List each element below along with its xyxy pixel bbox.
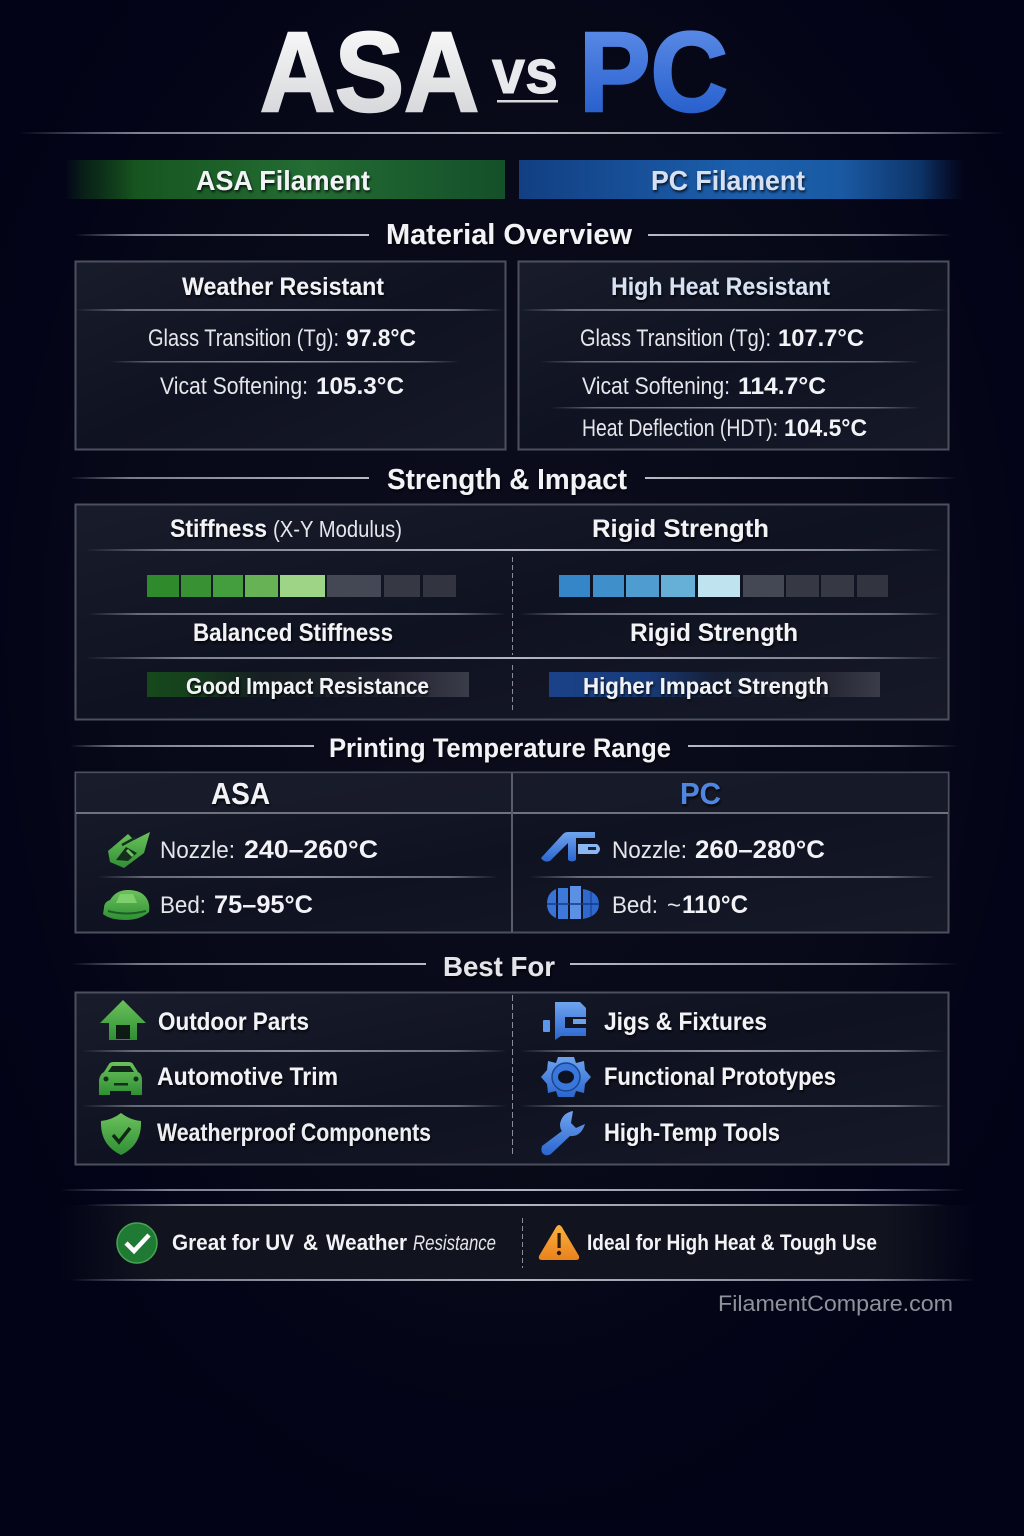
title: vs: [492, 38, 558, 107]
weatherproof components: Weatherproof Components: [157, 1119, 431, 1147]
balanced stiffness label: Balanced Stiffness: [193, 619, 393, 647]
banner: ASA Filament: ASA Filament: [196, 165, 370, 196]
ASA bed text: [160, 891, 313, 919]
PC nozzle text: [612, 836, 825, 864]
jigs and fixtures: Jigs & Fixtures: [604, 1008, 767, 1036]
ASA bed text: Bed:: [160, 892, 206, 919]
heading: Best For: Best For: [443, 951, 555, 982]
green stiffness bar: [147, 575, 456, 597]
UV callout text: &: [303, 1230, 318, 1255]
title: ASA: [260, 9, 479, 135]
heading: Material Overview: Material Overview: [386, 219, 632, 251]
icon: PC nozzle: [541, 832, 600, 862]
glass transition PC: Glass Transition (Tg):: [580, 325, 771, 352]
vicat softening PC: [582, 373, 826, 400]
PC nozzle text: 260–280°C: [695, 836, 825, 864]
ASA column title: ASA: [211, 776, 270, 811]
panel: best for: [76, 992, 948, 1164]
heading: Strength & Impact: Strength & Impact: [387, 464, 627, 496]
icon: ASA bed: [103, 890, 149, 920]
functional prototypes: Functional Prototypes: [604, 1063, 836, 1091]
banner: PC Filament: [519, 160, 965, 199]
glass transition ASA: 97.8°C: [346, 325, 416, 352]
vicat softening ASA: [160, 373, 404, 400]
UV callout text: Great for UV: [172, 1230, 294, 1255]
icon: ASA nozzle: [108, 832, 150, 868]
rigid strength label: Rigid Strength: [630, 619, 798, 647]
UV callout text: Weather: [326, 1230, 407, 1255]
title: [260, 9, 728, 135]
banner: PC Filament: PC Filament: [651, 165, 805, 196]
panel: printing temperature: [76, 772, 948, 932]
icon: gear: [541, 1057, 591, 1097]
icon: house: [100, 1000, 146, 1040]
panel: PC overview: High Heat Resistant: [611, 273, 831, 301]
PC bed text: ~: [667, 892, 681, 919]
PC column title: PC: [680, 776, 721, 811]
ASA nozzle text: [160, 836, 378, 864]
outdoor parts: Outdoor Parts: [158, 1008, 309, 1036]
icon: warning triangle: [539, 1225, 579, 1260]
vicat softening ASA: Vicat Softening:: [160, 373, 308, 400]
stiffness heading: Stiffness: [170, 515, 267, 543]
PC bed text: Bed:: [612, 892, 658, 919]
heading: Printing Temperature Range: Printing Temperature Range: [329, 733, 671, 763]
heat callout text: Ideal for High Heat & Tough Use: [587, 1230, 877, 1255]
panel: strength and impact: [76, 504, 948, 720]
site credit: FilamentCompare.com: [718, 1291, 953, 1316]
vicat softening ASA: 105.3°C: [316, 373, 404, 400]
higher impact bar: Higher Impact Strength: [583, 673, 829, 699]
stiffness heading: (X-Y Modulus): [273, 516, 402, 542]
panel: ASA overview: Weather Resistant: [182, 273, 385, 301]
UV callout text: Resistance: [413, 1232, 496, 1255]
icon: check circle: [117, 1223, 157, 1263]
ASA nozzle text: Nozzle:: [160, 837, 235, 864]
glass transition ASA: Glass Transition (Tg):: [148, 325, 339, 352]
PC nozzle text: Nozzle:: [612, 837, 687, 864]
UV callout text: [172, 1230, 496, 1255]
ASA nozzle text: 240–260°C: [244, 836, 378, 864]
panel: ASA overview: [76, 262, 506, 450]
ASA bed text: 75–95°C: [214, 891, 313, 919]
vicat softening PC: Vicat Softening:: [582, 373, 730, 400]
banner: ASA Filament: [65, 160, 505, 199]
title: PC: [579, 9, 728, 135]
automotive trim: Automotive Trim: [157, 1063, 338, 1091]
good impact bar: Good Impact Resistance: [186, 673, 429, 699]
callout band: [60, 1204, 975, 1281]
PC bed text: [612, 891, 748, 919]
blue strength bar: [559, 575, 888, 597]
icon: wrench: [541, 1111, 585, 1155]
vicat softening PC: 114.7°C: [738, 373, 826, 400]
PC bed text: 110°C: [682, 891, 748, 919]
icon: PC bed: [547, 886, 599, 919]
icon: shield: [101, 1113, 141, 1155]
heat deflection PC: 104.5°C: [784, 415, 867, 442]
glass transition PC: 107.7°C: [778, 325, 864, 352]
icon: jig: [543, 1002, 586, 1040]
panel: PC overview: [518, 262, 948, 450]
high-temp tools: High-Temp Tools: [604, 1119, 780, 1147]
icon: car: [99, 1062, 142, 1095]
stiffness heading: [170, 515, 402, 543]
rigid strength heading: Rigid Strength: [592, 515, 769, 543]
heat deflection PC: Heat Deflection (HDT):: [582, 415, 778, 442]
